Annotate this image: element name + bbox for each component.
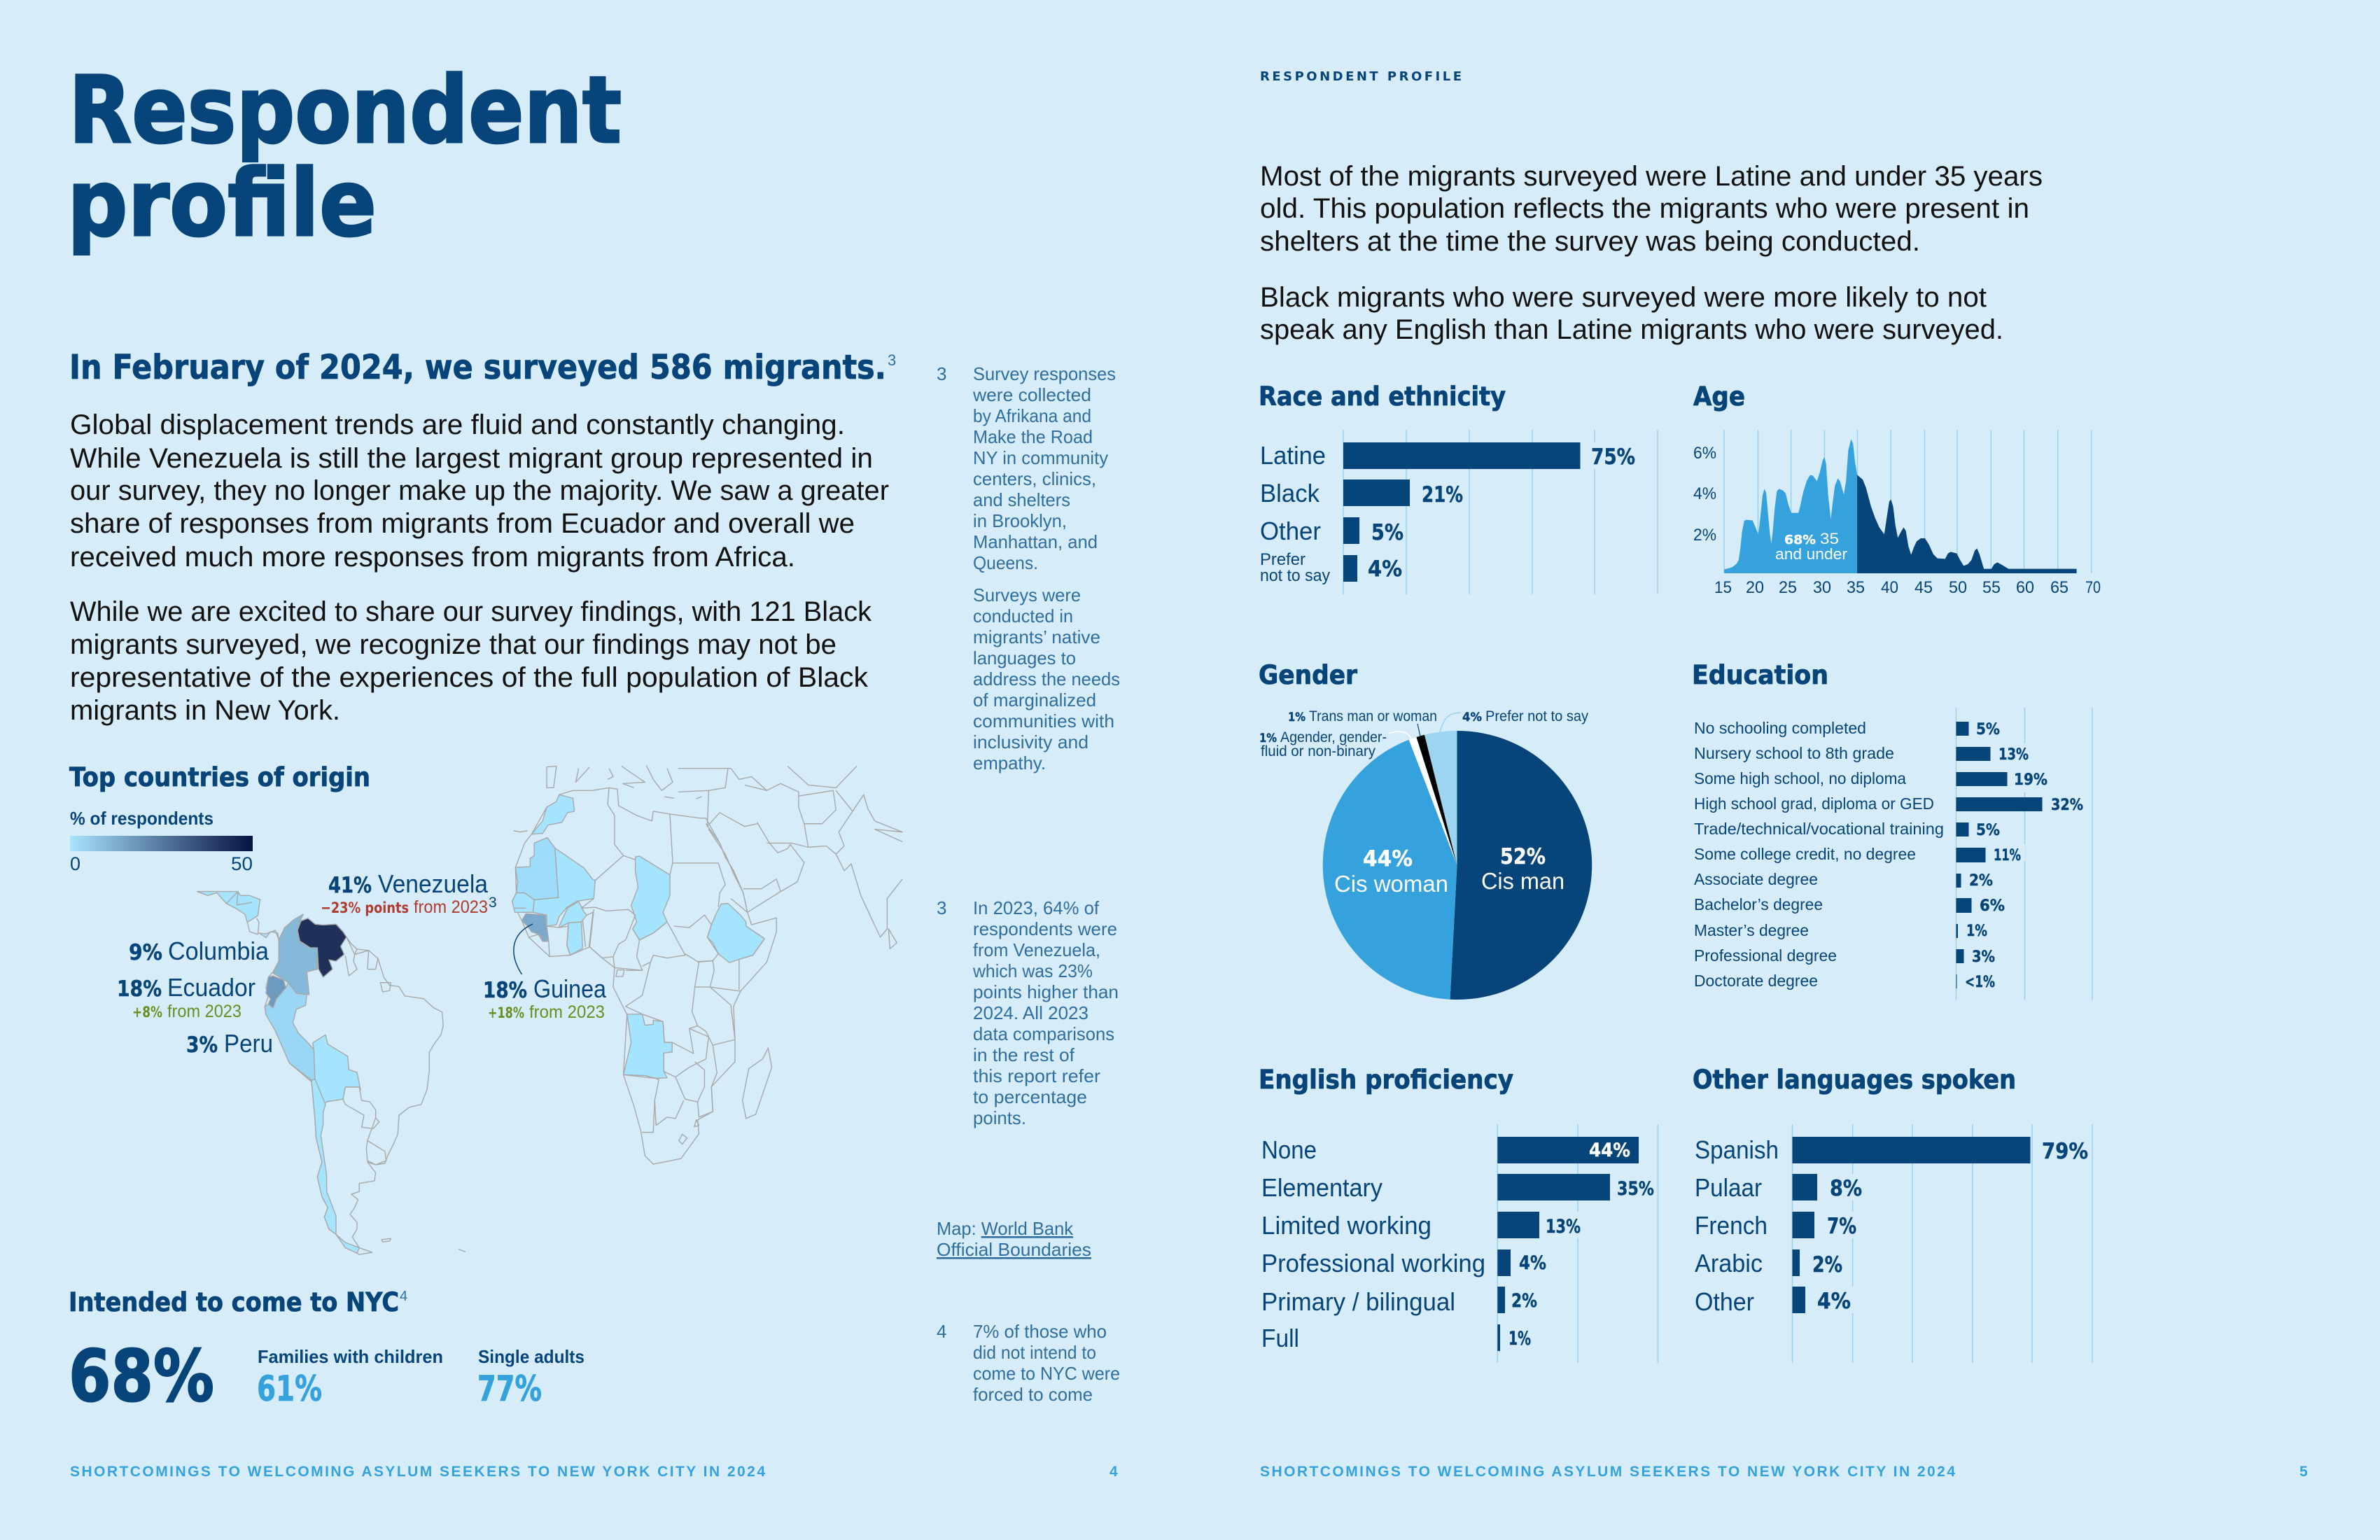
callout: Ecuador: 18% xyxy=(117,976,162,1002)
panel: age: 4% xyxy=(1693,484,1716,503)
callout: Peru: 3% xyxy=(186,1032,218,1058)
bar chart: education: Some high school, no diploma xyxy=(1694,769,1906,788)
intro paragraph left: share of responses from migrants from Ecuador and overall we xyxy=(70,508,855,539)
intro paragraph left: Global displacement trends are fluid and constantly changing. xyxy=(70,410,845,440)
stat: 68% intended to come: 68% xyxy=(69,1335,214,1418)
footnote 3: survey method: Make the Road xyxy=(973,426,1093,447)
callout: Venezuela xyxy=(321,869,497,917)
callout: Venezuela: 41% xyxy=(328,873,372,898)
bar chart: race: Other xyxy=(1260,517,1321,545)
footnote 3: survey method: Survey responses xyxy=(973,363,1116,384)
heading: education: Education xyxy=(1692,660,1828,690)
country: Mali xyxy=(533,848,595,926)
panel: gender: 52% xyxy=(1500,844,1546,869)
bar chart: education: Some college credit, no degree xyxy=(1694,845,1916,863)
bar chart: race: Latine xyxy=(1260,441,1326,470)
heading: race and ethnicity: Race and ethnicity xyxy=(1259,382,1506,412)
intro paragraph right: old. This population reflects the migrants who were present in xyxy=(1260,193,2029,224)
bar chart: education: 19% xyxy=(2014,771,2047,789)
footnote 3: 2023 comparison: 3 xyxy=(937,897,946,918)
panel: race and ethnicity xyxy=(1259,382,1658,594)
bar chart: race: 75% xyxy=(1591,444,1635,470)
heading: intended to come to NYC: 4 xyxy=(400,1289,407,1304)
bar chart: English proficiency: 44% xyxy=(1589,1140,1630,1161)
bar chart: other languages: Spanish xyxy=(1695,1135,1779,1164)
footnote 3: survey method: by Afrikana and xyxy=(973,405,1091,426)
footnote 4: 7% of those who xyxy=(973,1321,1107,1342)
bar chart: education: Master’s degree xyxy=(1694,921,1809,939)
map legend: % of respondents xyxy=(70,808,214,829)
intro paragraph right: Black migrants who were surveyed were more likely to not xyxy=(1260,282,1987,313)
bar chart: education: 5% xyxy=(1976,822,2000,839)
panel: age: 15 xyxy=(1714,578,1732,597)
callout: Columbia: 9% xyxy=(129,940,162,965)
footnote 3: 2023 comparison: respondents were xyxy=(973,918,1117,939)
stat: families with children xyxy=(257,1346,443,1409)
footnote 3: survey method: Manhattan, and xyxy=(973,531,1098,552)
bar chart: other languages: Arabic xyxy=(1695,1249,1763,1278)
panel: gender: 1% xyxy=(1259,732,1277,746)
callout: Ecuador xyxy=(117,973,255,1021)
callout: Peru: Peru xyxy=(224,1029,273,1058)
footnote 3: 2023 comparison: this report refer xyxy=(973,1065,1100,1086)
bar chart: education: 32% xyxy=(2051,797,2083,814)
bar chart: race: Prefer xyxy=(1260,550,1306,569)
country: Ghana xyxy=(567,922,582,955)
stat: families with children: Families with children xyxy=(258,1346,443,1367)
intro paragraph right: shelters at the time the survey was being conducted. xyxy=(1260,226,1920,257)
panel: age: 60 xyxy=(2016,578,2034,597)
footnote 4: come to NYC were xyxy=(973,1363,1120,1384)
footer right: SHORTCOMINGS TO WELCOMING ASYLUM SEEKERS TO NEW YORK CITY IN 2024 xyxy=(1260,1464,1955,1480)
map legend xyxy=(70,808,253,874)
intro paragraph left xyxy=(70,410,889,726)
footer left: SHORTCOMINGS TO WELCOMING ASYLUM SEEKERS TO NEW YORK CITY IN 2024 xyxy=(70,1464,765,1480)
panel: age: 20 xyxy=(1746,578,1764,597)
panel: age: 55 xyxy=(1982,578,2001,597)
bar chart: English proficiency: Elementary xyxy=(1261,1173,1382,1202)
footnote 3: 2023 comparison: points higher than xyxy=(973,981,1119,1002)
map: Central and South America xyxy=(197,892,465,1254)
bar chart: English proficiency xyxy=(1261,1135,1654,1352)
bar chart: race: not to say xyxy=(1260,566,1330,585)
intro paragraph left: received much more responses from migrants from Africa. xyxy=(70,542,795,573)
country: Chile xyxy=(312,1079,359,1253)
panel: age: 70 xyxy=(2085,578,2101,597)
panel: age: 25 xyxy=(1779,578,1797,597)
footnote 3: 2023 comparison: from Venezuela, xyxy=(973,939,1100,960)
stat: single adults: 77% xyxy=(477,1368,542,1409)
country: Peru xyxy=(265,983,315,1080)
footer right xyxy=(1260,1464,2308,1480)
panel: gender: fluid or non-binary xyxy=(1261,743,1376,760)
bar chart: education: 2% xyxy=(1969,872,1993,890)
South America outline xyxy=(265,914,443,1254)
map legend: 50 xyxy=(231,853,253,874)
footnote 3: survey method xyxy=(937,363,1120,774)
country: Senegal xyxy=(512,893,534,912)
bar chart: other languages: 7% xyxy=(1827,1214,1856,1239)
footnote 3: survey method: were collected xyxy=(972,384,1091,405)
country: Morocco xyxy=(531,794,575,834)
footnote 3: 2023 comparison: points. xyxy=(973,1107,1026,1128)
panel: gender: 1% xyxy=(1288,710,1306,724)
bar chart: education: 5% xyxy=(1976,721,2000,738)
stat: families with children: 61% xyxy=(257,1368,322,1409)
bar chart: other languages: 2% xyxy=(1812,1252,1842,1278)
map legend: 0 xyxy=(70,853,80,874)
callout: Ecuador: Ecuador xyxy=(167,973,255,1002)
footnote 3: survey method: migrants’ native xyxy=(973,626,1100,648)
footnote 3: survey method: and shelters xyxy=(973,489,1070,510)
bar chart: other languages: 4% xyxy=(1817,1289,1851,1314)
intro paragraph left: migrants in New York. xyxy=(70,695,340,726)
footnote 4: did not intend to xyxy=(973,1342,1096,1363)
heading: English proficiency: English proficiency xyxy=(1259,1065,1513,1095)
bar chart: English proficiency: Full xyxy=(1261,1324,1299,1352)
country: Chad xyxy=(631,856,670,940)
Central America xyxy=(197,892,279,939)
bar chart: education: Nursery school to 8th grade xyxy=(1694,744,1894,762)
area chart: age distribution xyxy=(1724,439,2077,573)
bar chart: other languages: 8% xyxy=(1830,1176,1862,1201)
bar chart: English proficiency: Professional working xyxy=(1261,1249,1485,1278)
bar chart: education: No schooling completed xyxy=(1694,719,1866,737)
bar chart: English proficiency: 1% xyxy=(1508,1328,1531,1350)
subheading: survey count: In February of 2024, we surveyed 586 migrants. xyxy=(69,348,886,387)
map source credit: Map: World Bank xyxy=(937,1218,1074,1239)
panel: age: 2% xyxy=(1693,526,1716,545)
footnote 3: 2023 comparison: 2024. All 2023 xyxy=(973,1002,1088,1023)
callout: Venezuela: 3 xyxy=(489,895,497,911)
footer left xyxy=(70,1464,1118,1480)
heading: gender: Gender xyxy=(1259,660,1358,690)
arrow: Guinea leader line xyxy=(514,924,533,974)
bar chart: English proficiency: 35% xyxy=(1617,1178,1654,1200)
country: Burkina Faso xyxy=(559,901,587,927)
footnote 3: survey method: Queens. xyxy=(973,552,1038,573)
callout: Columbia xyxy=(129,937,270,965)
panel: age: 35 xyxy=(1820,530,1839,547)
panel: age: 35 xyxy=(1847,578,1865,597)
title: profile xyxy=(67,150,377,258)
other South American borders xyxy=(343,937,465,1252)
bar chart: education xyxy=(1694,719,2083,991)
intro paragraph right: Most of the migrants surveyed were Latine and under 35 years xyxy=(1260,161,2043,192)
footer left: 4 xyxy=(1110,1464,1118,1480)
callout: Venezuela: Venezuela xyxy=(378,869,489,898)
heading: age: Age xyxy=(1693,382,1745,412)
intro paragraph left: representative of the experiences of the full population of Black xyxy=(70,662,869,693)
callout: Ecuador: +8% xyxy=(132,1004,162,1021)
footnote 3: survey method: NY in community xyxy=(973,447,1108,468)
bar chart: education: <1% xyxy=(1965,974,1995,991)
footnote 3: survey method: in Brooklyn, xyxy=(973,510,1067,531)
bar chart: education: Trade/technical/vocational training xyxy=(1694,820,1944,838)
callout: Columbia: Columbia xyxy=(168,937,270,965)
country: Ethiopia xyxy=(707,904,764,962)
panel: gender: 44% xyxy=(1363,846,1413,872)
title xyxy=(67,57,622,258)
bar chart: race xyxy=(1260,441,1639,585)
panel: gender: Cis woman xyxy=(1334,871,1448,897)
subheading: survey count: 3 xyxy=(888,351,896,369)
bar chart: education: Professional degree xyxy=(1694,946,1837,965)
bar chart: education: 11% xyxy=(1994,847,2021,864)
country: Mauritania xyxy=(515,838,559,899)
country: Guinea xyxy=(522,913,549,941)
footer right: 5 xyxy=(2300,1464,2308,1480)
footnote 3: survey method: of marginalized xyxy=(973,690,1096,710)
bar chart: education: Doctorate degree xyxy=(1694,972,1818,990)
panel: age xyxy=(1693,382,2101,597)
footnote 3: 2023 comparison: to percentage xyxy=(973,1086,1087,1107)
bar chart: race: 21% xyxy=(1422,482,1463,507)
callout: Guinea: Guinea xyxy=(533,974,607,1003)
panel: gender: Prefer not to say xyxy=(1485,708,1588,724)
intro paragraph left: While we are excited to share our survey findings, with 121 Black xyxy=(70,596,872,627)
Africa outline xyxy=(512,788,776,1164)
footnote 3: survey method: conducted in xyxy=(973,606,1073,626)
bar chart: education: Associate degree xyxy=(1694,870,1818,888)
callout: Ecuador: from 2023 xyxy=(167,1002,241,1021)
heading: top countries of origin: Top countries of origin xyxy=(69,762,370,792)
bar chart: English proficiency: Primary / bilingual xyxy=(1261,1287,1455,1316)
bar chart: race: 4% xyxy=(1368,556,1402,582)
footnote 3: 2023 comparison: which was 23% xyxy=(972,960,1093,981)
footnote 3: survey method: Surveys were xyxy=(973,584,1081,606)
other African and Asian borders xyxy=(514,766,902,1144)
footnote 4: 4 xyxy=(937,1321,946,1342)
callout: Venezuela: −23% points xyxy=(321,899,409,916)
footnote 3: 2023 comparison xyxy=(937,897,1119,1128)
intro paragraph right: speak any English than Latine migrants who were surveyed. xyxy=(1260,314,2003,345)
footnote 3: survey method: address the needs xyxy=(973,668,1120,690)
country: Angola xyxy=(624,1014,672,1079)
stat: single adults: Single adults xyxy=(478,1346,584,1367)
callout: Guinea: +18% xyxy=(488,1004,524,1021)
intro paragraph left: our survey, they no longer make up the majority. We saw a greater xyxy=(70,475,889,506)
panel: age: 45 xyxy=(1914,578,1933,597)
panel: age: 6% xyxy=(1693,444,1716,463)
bar chart: race: Black xyxy=(1260,479,1320,507)
country: Colombia xyxy=(273,914,317,995)
stat: single adults xyxy=(477,1346,584,1409)
bar chart: other languages: Pulaar xyxy=(1695,1173,1762,1202)
bar chart: English proficiency: None xyxy=(1261,1135,1317,1164)
bar chart: English proficiency: 13% xyxy=(1546,1216,1581,1238)
panel: other languages spoken xyxy=(1693,1065,2092,1363)
panel: education xyxy=(1692,660,2092,1000)
map: Africa, Europe edge and Middle East xyxy=(512,766,902,1164)
bar chart: education: Bachelor’s degree xyxy=(1694,895,1823,913)
heading: intended to come to NYC: Intended to come to NYC xyxy=(69,1287,399,1317)
intro paragraph left: While Venezuela is still the largest migrant group represented in xyxy=(70,443,873,474)
title: Respondent xyxy=(69,57,622,164)
bar chart: education: High school grad, diploma or GED xyxy=(1694,794,1934,813)
footnote 3: survey method: empathy. xyxy=(973,752,1046,774)
footnote 4 xyxy=(937,1321,1120,1405)
map source credit xyxy=(937,1218,1091,1260)
intro paragraph left: migrants surveyed, we recognize that our findings may not be xyxy=(70,629,836,660)
panel: age: and under xyxy=(1775,545,1847,563)
panel: gender: Cis man xyxy=(1481,868,1564,894)
panel: gender xyxy=(1259,660,1592,1000)
running header: RESPONDENT PROFILE xyxy=(1260,69,1462,84)
panel: age: 65 xyxy=(2050,578,2068,597)
bar chart: other languages: French xyxy=(1695,1211,1768,1240)
country: Bolivia xyxy=(313,1035,360,1105)
panel: English proficiency xyxy=(1259,1065,1658,1363)
footnote 4: forced to come xyxy=(973,1384,1093,1405)
panel: age: 40 xyxy=(1881,578,1898,597)
panel: gender: Trans man or woman xyxy=(1309,708,1437,724)
heading: other languages spoken: Other languages spoken xyxy=(1693,1065,2016,1095)
footnote 3: survey method: 3 xyxy=(937,363,946,384)
country: Ecuador xyxy=(266,976,286,1008)
callout: Guinea: 18% xyxy=(483,978,527,1003)
bar chart: education: 1% xyxy=(1966,923,1987,940)
panel: age: 50 xyxy=(1949,578,1967,597)
bar chart: English proficiency: 2% xyxy=(1511,1290,1537,1312)
map source credit: Official Boundaries xyxy=(937,1239,1091,1260)
bar chart: education: 13% xyxy=(1998,746,2029,764)
callout: Peru xyxy=(186,1029,273,1058)
footnote 3: survey method: inclusivity and xyxy=(973,732,1088,752)
intro paragraph right xyxy=(1260,161,2043,345)
callout: Guinea xyxy=(483,974,607,1022)
callout: Venezuela: from 2023 xyxy=(414,897,488,917)
bar chart: race: 5% xyxy=(1371,520,1404,545)
bar chart: English proficiency: Limited working xyxy=(1261,1211,1432,1240)
footnote 3: 2023 comparison: in the rest of xyxy=(973,1044,1075,1065)
footnote 3: survey method: centers, clinics, xyxy=(973,468,1096,489)
callout: Guinea: from 2023 xyxy=(529,1002,605,1022)
footnote 3: survey method: languages to xyxy=(973,648,1076,668)
bar chart: education: 6% xyxy=(1980,897,2005,915)
bar chart: English proficiency: 4% xyxy=(1519,1252,1546,1274)
panel: age: 30 xyxy=(1813,578,1831,597)
bar chart: other languages xyxy=(1695,1135,2088,1316)
bar chart: other languages: 79% xyxy=(2042,1139,2088,1164)
country: Venezuela xyxy=(298,918,346,977)
panel: gender: Agender, gender- xyxy=(1280,729,1387,746)
footnote 3: 2023 comparison: In 2023, 64% of xyxy=(973,897,1100,918)
bar chart: education: 3% xyxy=(1972,948,1995,966)
bar chart: other languages: Other xyxy=(1695,1287,1754,1316)
footnote 3: 2023 comparison: data comparisons xyxy=(973,1023,1114,1044)
panel: age: 68% xyxy=(1784,533,1816,547)
footnote 3: survey method: communities with xyxy=(973,710,1114,732)
panel: gender: 4% xyxy=(1462,710,1482,724)
pie chart: gender xyxy=(1323,731,1592,1000)
